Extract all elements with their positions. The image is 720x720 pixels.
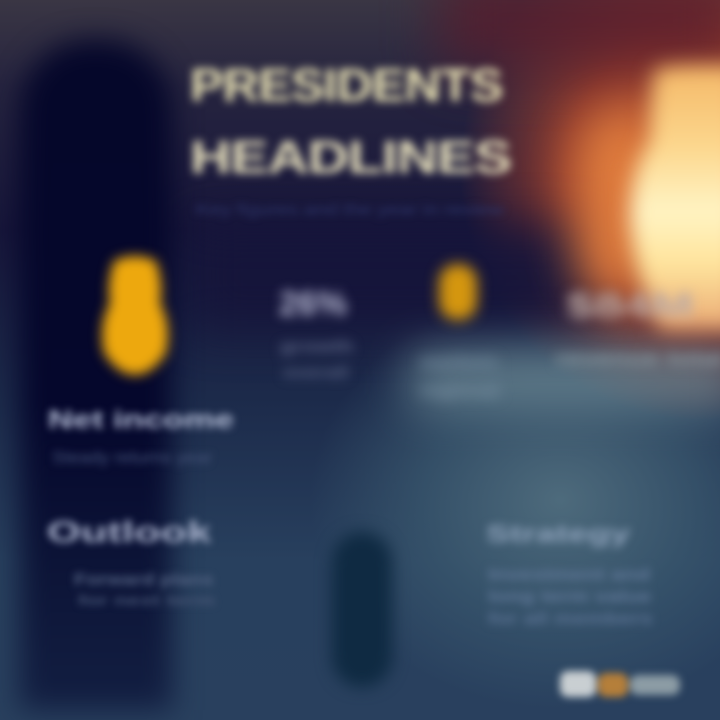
orange glow beside sun	[575, 110, 665, 300]
stat: third value	[556, 286, 720, 370]
subtitle: Key figures and the year in review	[196, 200, 503, 219]
text block: left lower: Forward plans	[74, 570, 213, 589]
text block: right lower: Strategy	[486, 521, 630, 548]
text block: left upper: Steady returns year	[52, 448, 212, 467]
icon: dark oval figure	[332, 532, 392, 687]
top right red glow	[440, 0, 720, 70]
icon: large yellow marker	[92, 246, 178, 384]
title: HEADLINES	[190, 131, 511, 183]
stat: second value: markets	[420, 353, 498, 372]
text block: left lower	[44, 516, 215, 608]
stat: first value: growth	[280, 337, 354, 356]
text block: left lower: Outlook	[47, 516, 211, 549]
title: PRESIDENTS	[190, 59, 502, 111]
text block: right lower: for all members	[488, 609, 653, 628]
text block: left upper: Net income	[48, 406, 234, 434]
text block: left upper	[44, 405, 237, 467]
stat: third value: revenue total	[556, 349, 720, 369]
silhouette: dark figure	[20, 40, 172, 710]
stat: first value: overall	[283, 363, 349, 382]
stat: second value: regional	[420, 381, 499, 400]
dark band behind subtitle and stats	[190, 225, 590, 330]
stat: second value	[420, 353, 499, 400]
text block: right lower	[484, 521, 653, 628]
text block: right lower: Investment and	[488, 565, 650, 584]
stat: first value	[274, 284, 355, 382]
text block: left lower: for next term	[78, 592, 215, 608]
title	[186, 59, 516, 183]
icon: small yellow marker	[439, 264, 477, 320]
logo	[554, 665, 685, 703]
lower right light band	[410, 350, 720, 410]
text block: right lower: long term value	[488, 587, 651, 606]
stat: third value: $84M	[566, 287, 694, 325]
stat: first value: 26%	[279, 285, 347, 323]
sun glow	[616, 50, 720, 344]
